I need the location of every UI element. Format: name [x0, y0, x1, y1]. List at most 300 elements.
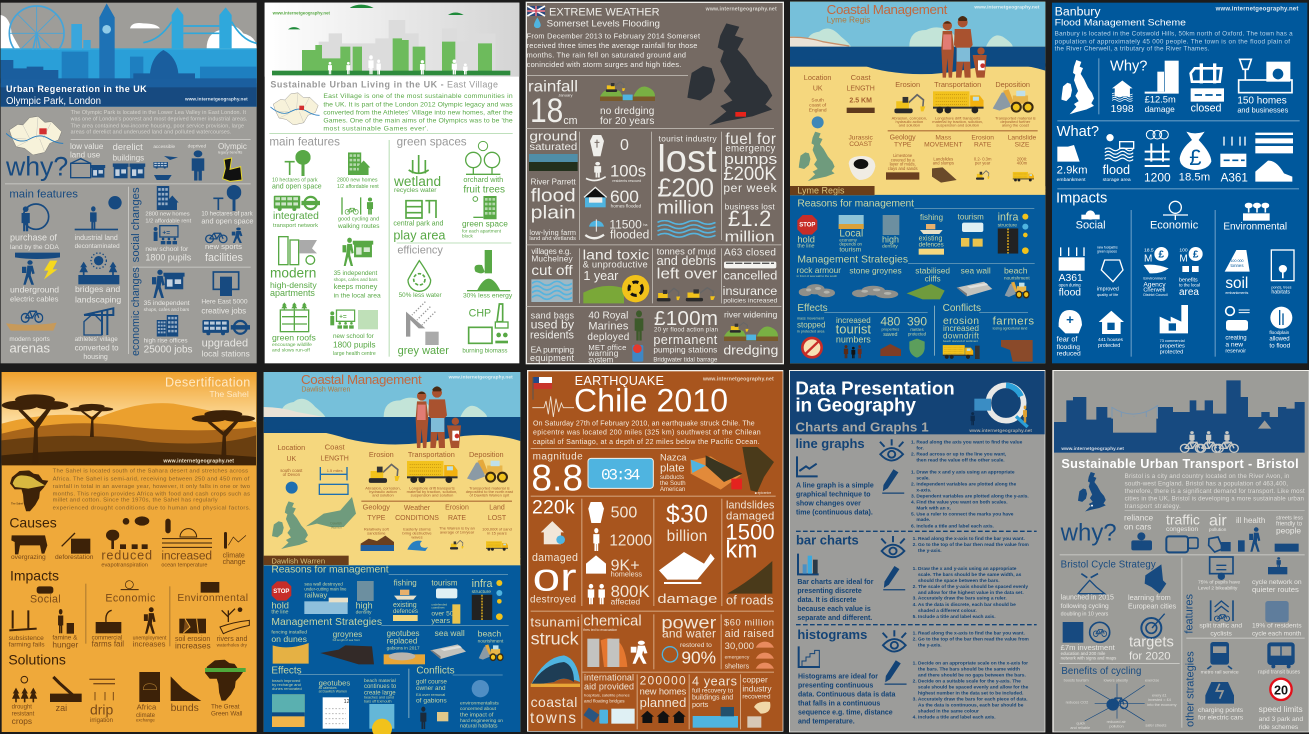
- icon: Chile flag: [533, 377, 552, 400]
- environmental: habitats: [1271, 250, 1294, 295]
- clock: 03:34: 03:34: [601, 467, 640, 485]
- deposition: Deposition: [469, 450, 504, 459]
- diagram: benefits of cycling hub: lowers obesity: [1104, 679, 1128, 683]
- panel: Sustainable Urban Transport Bristol: [1052, 370, 1309, 732]
- intro text: south-west England. Bristol has a population of 463,400,: [1125, 480, 1288, 487]
- heading: line graphs: line graphs: [795, 436, 865, 451]
- reason: traffic congestion: traffic: [1166, 512, 1200, 528]
- diagram: benefits of cycling hub: every £1: [1152, 693, 1167, 697]
- reason: infrastructure: infra: [998, 212, 1018, 224]
- social: fear of flooding: flooding: [1057, 344, 1080, 351]
- conflict: erosion increased downdrift: downdrift: [943, 331, 980, 340]
- environmental: soil: [1225, 250, 1250, 295]
- feature: underground electric cables: underground: [10, 285, 59, 295]
- feature: split traffic: split traffic and: [1199, 623, 1242, 630]
- economic: £18.5m: [1143, 247, 1169, 297]
- feature: bridges and landscaping: bridges and: [75, 284, 120, 294]
- economic: £100m: to the local: [1179, 283, 1200, 288]
- website: www.internetgeography.net: [968, 428, 1032, 433]
- effect: increased tourist numbers: increased: [836, 316, 871, 325]
- cause: increased ocean temperature: increased: [161, 549, 212, 563]
- heading: reasons for management: Reasons for management: [271, 564, 389, 575]
- text: drawing histograms: 3. Accurately draw the bars for each piece of data.: [913, 696, 1028, 702]
- stat: flood storage area: [1103, 134, 1134, 183]
- feature: new school and health centre: large health centre: [333, 351, 376, 357]
- panel: Coastal Management Dawlish Warren: [264, 372, 520, 734]
- economic: £18.5m: District Council: [1143, 293, 1168, 297]
- feature: cycling walking routes: good cycling and: [338, 217, 379, 223]
- mass movement: [924, 134, 963, 183]
- heading: why: why?: [5, 152, 68, 182]
- intro text: epicentre was located 200 miles (325 km) southwest of the Chilean: [533, 430, 761, 437]
- strategy: speed limits: and 3 park and: [1259, 716, 1303, 723]
- text: reading line graphs: for.: [916, 445, 925, 451]
- stat: new sports facilities: new sports: [205, 242, 242, 251]
- text: drawing bar charts: 4. As the data is discrete, each bar should be: [913, 602, 1016, 608]
- intro text: capital of Santiago, at a depth of 22 miles below the Pacific Ocean.: [533, 439, 760, 446]
- solution: zai: [50, 677, 82, 713]
- conflict: farmers: [993, 316, 1034, 362]
- location block: England: [809, 108, 827, 114]
- panel: Data Presentation in Geography: [789, 370, 1045, 732]
- stat: 1200 Olympic pools: 1200: [1144, 170, 1171, 184]
- stat: landslides damaged 1500km: damaged: [726, 510, 774, 522]
- block: tsunami struck: [530, 615, 580, 727]
- stat: 220k damaged or destroyed: [530, 498, 578, 605]
- impact: subsistence farming fails: [9, 610, 45, 648]
- text: drawing histograms: highest number in the data set to be included.: [918, 690, 1024, 696]
- stat: tourist industry lost £200 million: million: [657, 196, 714, 217]
- item: targets for 2020: targets: [1129, 634, 1174, 650]
- title: [795, 377, 955, 416]
- text: drawing line graphs: x-axis.: [916, 487, 932, 493]
- text: line graph description: A line graph is a simple: [796, 482, 874, 489]
- icon: family on beach: [416, 386, 461, 448]
- land lost: in 15 years: [487, 530, 507, 535]
- stat: fuel for pumps: £200K: [723, 164, 777, 185]
- stat: landslides damaged 1500km: [725, 499, 775, 607]
- feature: CHP burning biomass: burning biomass: [462, 348, 508, 355]
- website: www.internetgeography.net: [184, 97, 248, 102]
- stat: 12000 injured: [593, 528, 652, 551]
- text: drawing line graphs: 4. Find the value you want on both scales.: [911, 499, 1008, 505]
- stat: 2.9km embankment: 2.9km: [1057, 165, 1088, 177]
- feature: green space per block: green space: [462, 219, 508, 229]
- solution: Great Green Wall: [205, 660, 246, 717]
- mass movement: Landslides: [933, 156, 953, 161]
- strategy: sea wall: [957, 266, 992, 296]
- transportation: suspension and solution: [411, 493, 453, 498]
- social: houses protected: 441 houses: [1098, 337, 1124, 343]
- text: drawing histograms: 1. Decide on an appropriate scale on the x-axis for: [913, 660, 1028, 666]
- land lost: [482, 504, 512, 551]
- reason: stop hold the line: STOP: [799, 223, 815, 229]
- cause: climate change: [223, 532, 246, 566]
- diagram: benefits of cycling hub: invested = £4: [1148, 698, 1172, 702]
- environmental heading: Environmental: [177, 593, 248, 604]
- icon: 20 speed limit: 20: [1274, 683, 1288, 697]
- block: international aid: [583, 673, 635, 724]
- heading: reasons for management: Reasons for management: [797, 199, 914, 210]
- text: drawing bar charts: [913, 566, 1028, 620]
- social: fear of flooding: [1057, 310, 1082, 358]
- reason: stop hold the line: the line: [271, 609, 289, 615]
- feature: orchard with fruit trees: orchard with: [463, 175, 503, 184]
- strategy: rapid transit buses: [1258, 642, 1301, 675]
- strategy: groynes: full length of sea front: [333, 638, 360, 642]
- hero skyline of London: [1, 3, 257, 107]
- reason: infrastructure: [472, 578, 503, 620]
- erosion: [892, 80, 927, 128]
- intro text: East Village is one of the most sustainable communities in: [323, 93, 513, 100]
- economic: £18.5m: £: [1159, 249, 1165, 260]
- environmental: floodplain allowed to flood: [1269, 307, 1292, 349]
- text: line graph description: graphical technique to: [796, 491, 871, 498]
- deposition: deposited further: [1000, 119, 1031, 124]
- environmental: new reservoir: a new: [1225, 342, 1243, 349]
- social: quality of life: improved: [1097, 287, 1119, 293]
- intro text: therefore, there is a significant demand for transport. Like most: [1125, 488, 1305, 495]
- coast length block: [319, 443, 349, 494]
- clock: 03:34: [588, 458, 653, 488]
- text: histogram description: presenting continuous: [798, 682, 873, 689]
- location block: south coast: [280, 468, 303, 473]
- impact: subsistence farming fails: subsistence: [9, 635, 44, 642]
- strategy: groynes: [320, 629, 374, 664]
- stat: 390 metres protected: 390: [907, 315, 927, 329]
- feature: green roofs: encourage wildlife: [272, 342, 312, 348]
- intro text: rainfall in total in an average year, however, it only falls in one or two: [53, 484, 250, 490]
- block: power and water: 90%: [681, 648, 716, 668]
- intro text: millet and cotton. Since the 1970s, the Sahel has regularly: [53, 498, 218, 504]
- landslide size: 2008:: [1017, 156, 1027, 161]
- stat: 9K+ homeless: homeless: [611, 570, 642, 579]
- diagram: benefits of cycling hub: and reliable: [1070, 726, 1090, 730]
- panel: Coastal Management Lyme Regis: [790, 2, 1045, 363]
- geology type: layer of muds,: [890, 162, 916, 167]
- stat: 600 homes: [584, 186, 642, 209]
- economic: £100m: M: [1179, 253, 1188, 264]
- stat: high rise offices: [144, 315, 193, 356]
- environmental: new reservoir: [1225, 307, 1250, 355]
- feature: modern high-density apartments: modern: [270, 265, 316, 280]
- stat: 35 independent: [144, 270, 190, 312]
- intro text: population of approximately 45 000 people. The town is on the flood plain of: [1055, 38, 1290, 45]
- solution: drought resistant crops: crops: [12, 716, 32, 726]
- feature: CHP burning biomass: CHP: [469, 308, 491, 320]
- environmental heading: [1223, 203, 1287, 232]
- effect: beach improved: dunes renovated: [272, 686, 302, 691]
- stat: 9K+ homeless: 9K+: [611, 557, 640, 574]
- subtitle: East Village: [447, 79, 498, 89]
- heading: management strategies: Management Strategies: [797, 254, 908, 265]
- stat: Here East 5000: [201, 272, 248, 315]
- economic: £100m: £: [1193, 249, 1199, 260]
- transportation: Transportation: [934, 80, 981, 89]
- social: A361 open: [1059, 247, 1085, 299]
- block: river widening: dredging: [723, 343, 778, 358]
- feature: industrial land decontaminated: [75, 196, 122, 250]
- block: river widening: [723, 309, 778, 358]
- text: drawing bar charts: 2. The scale of the y-axis should be spaced evenly: [913, 584, 1028, 590]
- stat: 2.9km embankment: embankment: [1057, 177, 1086, 183]
- block: chemical fires: [583, 613, 647, 667]
- text: histogram description: [798, 673, 896, 725]
- stat: new sports facilities: [205, 228, 243, 264]
- block: flood plain: plain: [531, 201, 576, 222]
- economic: £18.5m: Cherwell: [1143, 288, 1165, 294]
- geology type: [361, 502, 394, 551]
- effect: beach material: create large: [364, 690, 396, 696]
- heading: why: Why?: [1110, 59, 1147, 75]
- block: 4 years: buildings and: [692, 695, 733, 702]
- effect: geotubes calendar: 12: [344, 699, 350, 705]
- intro text: From December 2013 to February 2014 Somerset: [527, 31, 700, 40]
- feature: pupils bikeability: Level 2 bikeability: [1198, 586, 1238, 592]
- impact: famine and hunger: famine &: [52, 635, 78, 642]
- feature: residents cycle: cycle each month: [1252, 630, 1302, 637]
- stat: tourist industry lost £200 million: lost: [657, 138, 717, 181]
- item: launched in 2015: following cycling: [1061, 603, 1109, 610]
- stat: $30 billion damage: damage: [657, 591, 717, 606]
- stat: rainfall 18cm: January: [558, 93, 573, 98]
- weather conditions: Weather: [404, 505, 431, 512]
- geology type: covered by a: [891, 157, 915, 162]
- cause: climate change: climate: [223, 552, 245, 559]
- text: reading line graphs: 2. Read across or up to the line you want,: [911, 451, 1007, 457]
- mass movement: MOVEMENT: [924, 142, 963, 149]
- deposition: [466, 450, 514, 498]
- block: aid raised: 30,000: [725, 641, 754, 651]
- block: chemical fires: chemical: [583, 613, 642, 629]
- website: www.internetgeography.net: [702, 377, 774, 383]
- feature: green space per block: [462, 196, 508, 239]
- stat: 2800 new homes: 1/2 affordable rent: [145, 218, 192, 224]
- title main: Chile 2010: [574, 383, 728, 419]
- reason: low value land use: low value: [70, 142, 104, 151]
- block: ground saturated: ground: [529, 129, 577, 144]
- block: villages cut off: cut off: [531, 263, 573, 278]
- stat: fuel for pumps: per week: [723, 181, 778, 195]
- impact: unemployment increases: increases: [133, 640, 166, 649]
- banner: Dawlish Warren: Dawlish Warren: [271, 557, 325, 566]
- stat: 600 homes: 600: [610, 186, 639, 206]
- hero green city skyline: [265, 3, 519, 77]
- heading: main features: main features: [269, 136, 340, 149]
- feature: grey water: grey water: [398, 345, 449, 357]
- feature: independent shops: [334, 238, 381, 300]
- impact: soil erosion increases: [175, 619, 211, 650]
- block: new homes planned: planned: [640, 695, 686, 710]
- strategy: metro rail: metro rail service: [1201, 669, 1239, 675]
- mass movement: Mass: [935, 134, 952, 141]
- erosion rate: [971, 134, 994, 180]
- strategy: fencing on dunes: fencing installed: [271, 630, 307, 636]
- block: power and water: power: [661, 613, 717, 633]
- reason: infrastructure: infra: [472, 578, 492, 590]
- text: reading bar charts: 1. Read along the x-axis to find the bar you want.: [913, 536, 1025, 542]
- jurassic coast: Jurassic: [848, 134, 874, 141]
- stat: 390 metres protected: protected: [908, 332, 927, 337]
- icon: pencil: [883, 566, 905, 590]
- block: land toxic: & unproductive: [583, 259, 648, 269]
- impact: rivers and waterholes dry: waterholes dry: [217, 642, 248, 647]
- social: quality of life: quality of life: [1097, 293, 1118, 297]
- block: international aid: and floating bridges: [584, 698, 625, 703]
- panel: Desertification The Sahel: [2, 372, 257, 732]
- intro text: months. The rain fell on saturated ground and: [527, 50, 686, 59]
- feature: cycling walking routes: walking routes: [337, 223, 380, 230]
- stat: 0 deaths: 0: [620, 137, 629, 154]
- heading: conflicts: Conflicts: [943, 303, 981, 314]
- feature: green roofs: and slows run-off: [272, 347, 310, 353]
- reason: high density: [882, 215, 899, 250]
- heading: why: why?: [1060, 519, 1117, 546]
- coast length block: LENGTH: [320, 455, 349, 462]
- stat: Here East 5000: creative jobs: [201, 306, 246, 315]
- text: drawing bar charts: 3. Accurately draw the bars using a ruler.: [913, 596, 1007, 602]
- diagram: subduction and South America: ■ epicentre: [755, 491, 771, 495]
- block: power and water: restored to: [680, 642, 712, 649]
- effect: beach material: beaches and sand: [364, 695, 394, 699]
- solution: drip irrigation: drip: [90, 701, 114, 717]
- reason: railway: railway: [304, 590, 327, 599]
- social: fear of flooding: reduced: [1057, 351, 1081, 358]
- impact: rivers and waterholes dry: rivers and: [217, 636, 247, 643]
- stat: £100m plan: £100m: [654, 307, 718, 330]
- intro text: [533, 420, 761, 446]
- website: www.internetgeography.net: [973, 5, 1040, 11]
- social heading: Social: [1076, 219, 1106, 231]
- economic heading: [105, 581, 156, 604]
- map: UK: [1061, 60, 1094, 114]
- reason: ill health: ill health: [1236, 516, 1265, 525]
- diagram: benefits of cycling hub: pollution: [1109, 725, 1124, 729]
- block: international aid: aid provided: [584, 682, 634, 692]
- landslide size: Landslide: [1008, 134, 1037, 141]
- text: bar chart description: presenting discrete: [797, 588, 862, 595]
- transportation: [932, 80, 984, 128]
- stat: business lost: million: [725, 229, 775, 245]
- block: 4 years: full recovery to: [692, 688, 734, 695]
- solution: Africa climate exchange: Africa: [137, 702, 157, 711]
- subtitle: Somerset Levels Flooding: [547, 19, 660, 29]
- stat: business lost: £1.2: [728, 206, 771, 231]
- heading: green spaces: green spaces: [397, 136, 467, 149]
- map: UK: [1078, 472, 1106, 511]
- feature: purchase of land: [10, 204, 59, 251]
- heading: other strategies: other strategies: [1184, 651, 1196, 727]
- erosion: hydraulic action: [895, 119, 923, 124]
- feature: residents cycle: [1252, 601, 1302, 637]
- item: targets for 2020: for 2020: [1129, 650, 1171, 662]
- stat: 500 dead: 500: [611, 505, 637, 522]
- erosion rate: The Warren is by an: [439, 526, 475, 531]
- feature: modern high-density apartments: apartments: [270, 288, 315, 298]
- intro text: received three times the average rainfall for those: [527, 41, 697, 50]
- stat: A361: A361: [1221, 171, 1248, 184]
- block: villages cut off: villages e.g.: [531, 247, 571, 256]
- cause: reduced evapotranspiration: reduced: [101, 549, 152, 563]
- reason: tourism: coastlines: [431, 606, 445, 610]
- reason: Olympic legacy benefits: legacy benefits: [218, 151, 243, 155]
- effect: geotubes calendar: geotubes: [319, 678, 350, 687]
- reason: streets less friendly: streets less: [1276, 516, 1303, 522]
- title: Sustainable Urban Living in the UK -: [270, 79, 444, 89]
- block: tonnes of mud: tonnes of mud: [657, 246, 716, 256]
- block: sand bags: equipment: [530, 353, 574, 363]
- stat: fuel for pumps: pumps: [724, 152, 777, 168]
- block: power and water: and water: [662, 627, 716, 641]
- location block: South: [811, 98, 824, 104]
- feature: orchard with fruit trees: fruit trees: [463, 185, 505, 196]
- stat: £18.5m: [1179, 132, 1211, 183]
- text: reading line graphs: then read the value off the other scale.: [916, 458, 1005, 464]
- panel: Earthquake Chile 2010: [527, 370, 783, 732]
- solution: drought resistant crops: resistant: [12, 711, 35, 717]
- title: EXTREME WEATHER: [549, 6, 660, 18]
- intro text: months. This region provides Africa with food and cash crops such as: [53, 492, 250, 498]
- stat: £100m plan: pumping stations: [653, 345, 717, 355]
- block: tsunami struck: towns: [530, 710, 576, 727]
- stat: 390 metres protected: [907, 315, 927, 358]
- conflict: golf course owner: EA over removal: [416, 692, 445, 697]
- strategy: stabilised cliffs: cliffs: [925, 275, 941, 284]
- effect: beach material: [364, 678, 397, 734]
- environmental: habitats: ponds, trees: [1271, 286, 1292, 290]
- effect: increased tourist numbers: [836, 316, 871, 358]
- effect: geotubes calendar: at Dawlish Warren: [319, 690, 347, 694]
- solution: Great Green Wall: The Great: [211, 704, 240, 711]
- feature: bridges and landscaping: [75, 253, 121, 304]
- reason: deprived: [188, 143, 207, 181]
- text: histogram description: that falls in a continuous: [798, 700, 880, 707]
- strategy: beach nourishment: beach: [478, 628, 501, 638]
- feature: purchase of land: purchase of: [10, 233, 57, 243]
- beach scene: [790, 2, 1045, 74]
- map: UK: [799, 132, 835, 181]
- landslide size: SIZE: [1015, 142, 1030, 149]
- solution: Great Green Wall: Green Wall: [211, 710, 242, 717]
- reason: traffic congestion: [1166, 512, 1200, 552]
- text: drawing line graphs: scale.: [916, 475, 930, 481]
- heading: histograms: histograms: [797, 627, 867, 642]
- block: 40 Royal Marines: deployed: [587, 332, 629, 343]
- block: aid raised: aid raised: [725, 628, 774, 640]
- feature: cycling walking routes: [337, 197, 380, 230]
- conflict: environmentalists: concerned about: [460, 706, 497, 712]
- subtitle: Lyme Regis: [827, 15, 870, 25]
- deposition: Deposition: [995, 80, 1030, 89]
- heading: effects: Effects: [797, 303, 828, 314]
- reason: railway: under-cutting main line: [304, 586, 347, 591]
- strategy: sea wall: sea wall: [961, 266, 991, 276]
- text: drawing bar charts: shaded a different colour.: [918, 608, 977, 614]
- coast length block: 2.5 KM: [849, 98, 872, 105]
- social: fear of flooding: +: [1066, 312, 1074, 327]
- conflict: farmers: losing agricultural land: [993, 326, 1027, 330]
- stat: upgraded stations: local stations: [202, 348, 250, 358]
- icon: 20 speed limit: [1270, 679, 1292, 700]
- weather conditions: [395, 505, 439, 551]
- feature: modern sports arenas: [6, 311, 57, 356]
- economic: £18.5m: 18.5: [1144, 248, 1154, 254]
- block: A63 closed: insurance: [723, 284, 778, 298]
- feature: park and open space: [272, 150, 322, 191]
- feature: grey water: [398, 302, 449, 357]
- block: A63 closed: policies increased: [723, 298, 778, 305]
- stat: 100s rescued: [586, 162, 646, 183]
